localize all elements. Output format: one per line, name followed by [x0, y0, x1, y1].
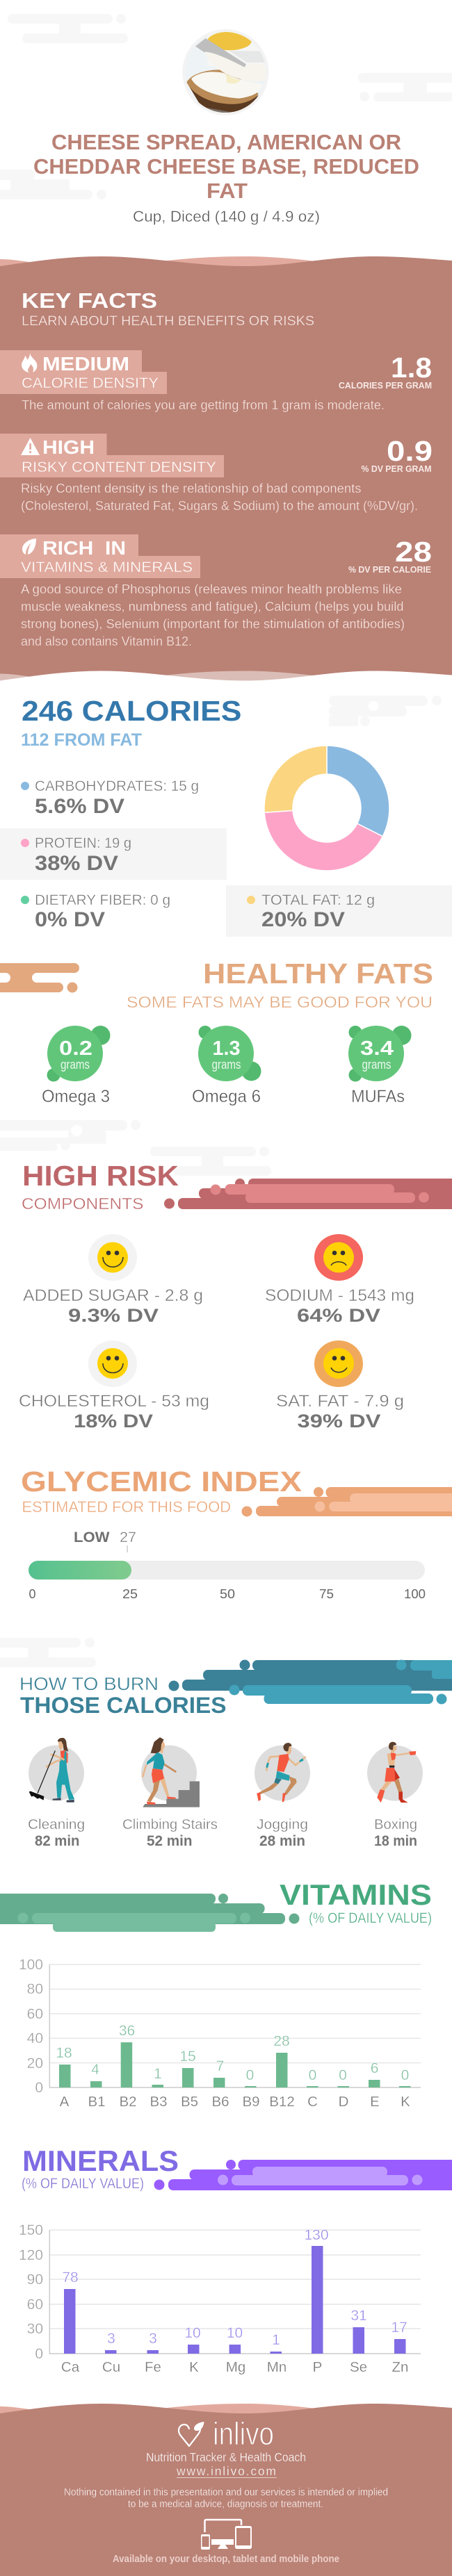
risky content density block: 0.9: [387, 435, 433, 467]
calorie density block: [0, 350, 432, 412]
glycemic index gauge: 50: [220, 1587, 235, 1601]
bar chart: vitamins: 40: [27, 2031, 43, 2046]
glycemic index gauge: 100: [404, 1587, 426, 1601]
risky content density block: [0, 434, 433, 513]
risk: added sugar: ADDED SUGAR - 2.8 g: [23, 1286, 203, 1305]
glycemic index gauge: 25: [122, 1587, 138, 1601]
bar chart: vitamins: 18: [56, 2045, 72, 2061]
food photo: cheese spread on bread: [182, 29, 268, 115]
bar chart: minerals: Se: [350, 2359, 367, 2375]
bar chart: vitamins: 4: [91, 2062, 99, 2078]
title: CHEESE SPREAD, AMERICAN OR: [51, 130, 401, 154]
donut chart: [264, 746, 389, 871]
activity: boxing: [367, 1742, 423, 1849]
stat: omega 3: grams: [60, 1058, 90, 1072]
bar chart: vitamins: 6: [371, 2060, 378, 2076]
key facts heading: [22, 288, 314, 329]
bar chart: minerals: 10: [184, 2325, 201, 2341]
calorie density block: 1.8: [391, 352, 432, 384]
decorative band: glycemic index: [242, 1487, 452, 1516]
stat: omega 3: 0.2: [59, 1037, 92, 1060]
glycemic index heading: ESTIMATED FOR THIS FOOD: [22, 1498, 231, 1516]
bar chart: vitamins: C: [307, 2094, 318, 2110]
activity: cleaning: 82 min: [35, 1833, 79, 1849]
vitamins and minerals block: 28: [395, 536, 432, 568]
stat: omega 6: Omega 6: [192, 1087, 261, 1106]
glycemic index heading: GLYCEMIC INDEX: [21, 1466, 302, 1498]
risk: sodium: 64% DV: [297, 1305, 380, 1326]
title: [33, 130, 419, 203]
bar chart: vitamins: B12: [269, 2094, 295, 2110]
risk: cholesterol: [19, 1340, 209, 1431]
bar chart: minerals: 60: [27, 2297, 43, 2313]
glycemic index gauge: 27: [120, 1529, 136, 1545]
stat: MUFAs: grams: [362, 1058, 391, 1072]
bar chart: minerals: 31: [350, 2308, 367, 2324]
healthy fats heading: SOME FATS MAY BE GOOD FOR YOU: [127, 993, 433, 1011]
minerals heading: MINERALS: [22, 2144, 179, 2177]
risky content density block: RISKY CONTENT DENSITY: [22, 459, 216, 475]
risk: sodium: [265, 1234, 414, 1326]
stat: protein: PROTEIN: 19 g: [35, 835, 131, 851]
minerals heading: [22, 2144, 179, 2192]
vitamins and minerals block: and also contains Vitamin B12.: [21, 634, 192, 648]
healthy fats heading: HEALTHY FATS: [203, 958, 433, 990]
bar chart: vitamins: D: [339, 2094, 348, 2110]
bar chart: minerals: Ca: [61, 2359, 80, 2375]
bar chart: vitamins: B2: [119, 2094, 137, 2110]
burn calories heading: THOSE CALORIES: [20, 1693, 227, 1718]
vitamins heading: VITAMINS: [280, 1878, 432, 1911]
bar chart: vitamins: A: [60, 2094, 70, 2110]
vitamins and minerals block: muscle weakness, numbness and fatigue), Calcium (helps you build: [21, 600, 403, 614]
icon: inlivo heart logo: [179, 2422, 204, 2446]
activity: boxing: Boxing: [374, 1817, 417, 1832]
bar chart: vitamins: E: [370, 2094, 380, 2110]
bar chart: minerals: 90: [27, 2272, 43, 2288]
bar chart: minerals: Cu: [102, 2359, 120, 2375]
stat: omega 3: [42, 1026, 110, 1106]
disclaimer: Nothing contained in this presentation and our services is intended or implied: [64, 2486, 388, 2498]
bar chart: vitamins: 36: [119, 2023, 135, 2039]
decorative band: high risk: [164, 1179, 452, 1209]
key facts heading: LEARN ABOUT HEALTH BENEFITS OR RISKS: [22, 314, 314, 329]
bar chart: vitamins: B3: [150, 2094, 168, 2110]
icon: desktop, tablet and phone: [201, 2520, 252, 2550]
title: FAT: [207, 179, 248, 203]
stat: omega 6: [192, 1026, 261, 1106]
bar chart: minerals: 0: [35, 2346, 43, 2362]
bar chart: minerals: Mg: [226, 2359, 245, 2375]
activity: cleaning: [28, 1738, 85, 1849]
risky content density block: % DV PER GRAM: [362, 463, 431, 474]
stat: total fat: TOTAL FAT: 12 g: [261, 892, 375, 908]
bar chart: minerals: 1: [272, 2332, 280, 2348]
bar chart: minerals: 150: [19, 2222, 43, 2238]
brand name: inlivo: [213, 2415, 274, 2452]
bar chart: vitamins: 20: [27, 2056, 43, 2072]
risk: added sugar: 9.3% DV: [68, 1305, 159, 1326]
risk: added sugar: [23, 1234, 203, 1326]
availability note: Available on your desktop, tablet and mobile phone: [113, 2553, 339, 2565]
bar chart: vitamins: 15: [179, 2049, 196, 2065]
activity: boxing: 18 min: [374, 1833, 417, 1849]
vitamins and minerals block: RICH IN: [42, 537, 126, 559]
stat: dietary fiber: [21, 892, 170, 931]
minerals heading: (% OF DAILY VALUE): [22, 2176, 144, 2192]
bar chart: minerals: Fe: [145, 2359, 161, 2375]
stat: omega 6: 1.3: [213, 1037, 241, 1060]
activity: jogging: 28 min: [259, 1833, 305, 1849]
bar chart: minerals: 30: [27, 2321, 43, 2337]
burn calories heading: [19, 1673, 227, 1718]
title: CHEDDAR CHEESE BASE, REDUCED: [33, 154, 419, 179]
glycemic index gauge: 75: [319, 1587, 334, 1601]
bar chart: vitamins: K: [401, 2094, 410, 2110]
bar chart: vitamins: B1: [88, 2094, 106, 2110]
decorative band: minerals: [154, 2160, 452, 2190]
risky content density block: Risky Content density is the relationship of bad components: [21, 482, 362, 495]
stat: dietary fiber: 0% DV: [35, 908, 105, 931]
high risk heading: [22, 1160, 179, 1213]
activity: climbing stairs: 52 min: [147, 1833, 192, 1849]
high risk heading: COMPONENTS: [22, 1195, 143, 1213]
activity: climbing stairs: [122, 1737, 218, 1849]
decorative band: healthy fats: [0, 963, 79, 992]
glycemic index gauge: [29, 1529, 426, 1601]
stat: omega 6: grams: [211, 1058, 241, 1072]
bar chart: vitamins: 0: [246, 2067, 254, 2083]
risky content density block: HIGH: [42, 436, 95, 458]
bar chart: minerals: [19, 2222, 421, 2375]
stat: dietary fiber: DIETARY FIBER: 0 g: [35, 892, 170, 908]
bar chart: vitamins: 100: [19, 1957, 43, 1973]
bar chart: vitamins: 28: [273, 2033, 290, 2049]
stat: protein: 38% DV: [35, 852, 118, 875]
bar chart: vitamins: 0: [339, 2067, 347, 2083]
risk: saturated fat: [276, 1340, 404, 1431]
stat: total fat: 20% DV: [261, 908, 345, 931]
risk: saturated fat: 39% DV: [298, 1411, 381, 1431]
bar chart: vitamins: B9: [242, 2094, 260, 2110]
panel: key facts: [0, 256, 452, 695]
vitamins and minerals block: A good source of Phosphorus (releaves minor health problems like: [21, 582, 402, 596]
bar chart: vitamins: [19, 1957, 421, 2110]
risk: saturated fat: SAT. FAT - 7.9 g: [276, 1392, 404, 1411]
vitamins and minerals block: [0, 534, 432, 648]
bar chart: minerals: 17: [391, 2320, 407, 2336]
glycemic index gauge: 0: [29, 1587, 36, 1601]
calories heading: [21, 695, 242, 750]
bar chart: minerals: 3: [149, 2331, 157, 2347]
bar chart: minerals: 78: [62, 2270, 79, 2286]
calorie density block: MEDIUM: [42, 353, 129, 375]
stat: total fat: [226, 885, 452, 937]
bar chart: vitamins: 0: [401, 2067, 409, 2083]
calorie density block: CALORIES PER GRAM: [339, 380, 432, 391]
bar chart: minerals: 120: [19, 2247, 43, 2263]
high risk heading: HIGH RISK: [22, 1160, 179, 1192]
bar chart: vitamins: 80: [27, 1981, 43, 1997]
glycemic index gauge: LOW: [74, 1529, 110, 1545]
calories heading: 112 FROM FAT: [21, 730, 142, 750]
vitamins and minerals block: % DV PER CALORIE: [348, 564, 431, 575]
vitamins heading: (% OF DAILY VALUE): [309, 1910, 432, 1926]
healthy fats heading: [127, 958, 433, 1011]
vitamins and minerals block: VITAMINS & MINERALS: [21, 559, 193, 575]
bar chart: minerals: P: [313, 2359, 322, 2375]
bar chart: vitamins: 7: [216, 2058, 224, 2074]
glycemic index heading: [21, 1466, 302, 1516]
bar chart: minerals: Mn: [267, 2359, 286, 2375]
risk: cholesterol: 18% DV: [74, 1411, 153, 1431]
tagline and link: www.inlivo.com: [176, 2464, 276, 2478]
disclaimer: [64, 2486, 388, 2510]
bar chart: vitamins: 1: [154, 2066, 162, 2082]
risk: sodium: SODIUM - 1543 mg: [265, 1286, 414, 1305]
calorie density block: The amount of calories you are getting from 1 gram is moderate.: [22, 398, 385, 412]
vitamins and minerals block: strong bones), Selenium (important for the stimulation of antibodies): [21, 617, 405, 631]
activity: jogging: Jogging: [257, 1817, 308, 1832]
tagline and link: Nutrition Tracker & Health Coach: [146, 2450, 306, 2464]
risky content density block: (Cholesterol, Saturated Fat, Sugars & Sodium) to the amount (%DV/gr).: [21, 499, 418, 513]
bar chart: vitamins: 60: [27, 2006, 43, 2022]
activity: cleaning: Cleaning: [28, 1817, 85, 1832]
disclaimer: to be a medical advice, diagnosis or treatment.: [128, 2498, 323, 2510]
bar chart: vitamins: B5: [181, 2094, 198, 2110]
bar chart: minerals: 10: [227, 2325, 243, 2341]
stat: carbohydrates: [21, 778, 199, 818]
stat: MUFAs: 3.4: [360, 1037, 394, 1060]
stat: omega 3: Omega 3: [42, 1087, 110, 1106]
tagline and link: [146, 2450, 306, 2478]
calories heading: 246 CALORIES: [22, 695, 242, 727]
stat: protein: [0, 828, 227, 880]
stat: MUFAs: [348, 1026, 412, 1106]
bar chart: vitamins: 0: [309, 2067, 316, 2083]
stat: carbohydrates: 5.6% DV: [35, 795, 124, 818]
decorative band: burn calories: [168, 1659, 452, 1704]
bar chart: minerals: 3: [107, 2331, 115, 2347]
bar chart: minerals: 130: [304, 2227, 329, 2243]
panel: footer: [0, 2404, 452, 2576]
risk: cholesterol: CHOLESTEROL - 53 mg: [19, 1392, 209, 1411]
activity: jogging: [255, 1743, 310, 1849]
calorie density block: CALORIE DENSITY: [22, 375, 159, 391]
burn calories heading: HOW TO BURN: [19, 1673, 159, 1694]
key facts heading: KEY FACTS: [22, 288, 157, 313]
vitamins heading: [280, 1878, 432, 1926]
bar chart: vitamins: B6: [211, 2094, 229, 2110]
bar chart: minerals: Zn: [392, 2359, 408, 2375]
bar chart: vitamins: 0: [35, 2080, 43, 2096]
activity: climbing stairs: Climbing Stairs: [122, 1817, 218, 1832]
decorative band: vitamins: [0, 1894, 299, 1932]
stat: carbohydrates: CARBOHYDRATES: 15 g: [35, 778, 199, 794]
bar chart: minerals: K: [189, 2359, 199, 2375]
stat: MUFAs: MUFAs: [351, 1087, 405, 1106]
serving size: Cup, Diced (140 g / 4.9 oz): [133, 208, 320, 225]
